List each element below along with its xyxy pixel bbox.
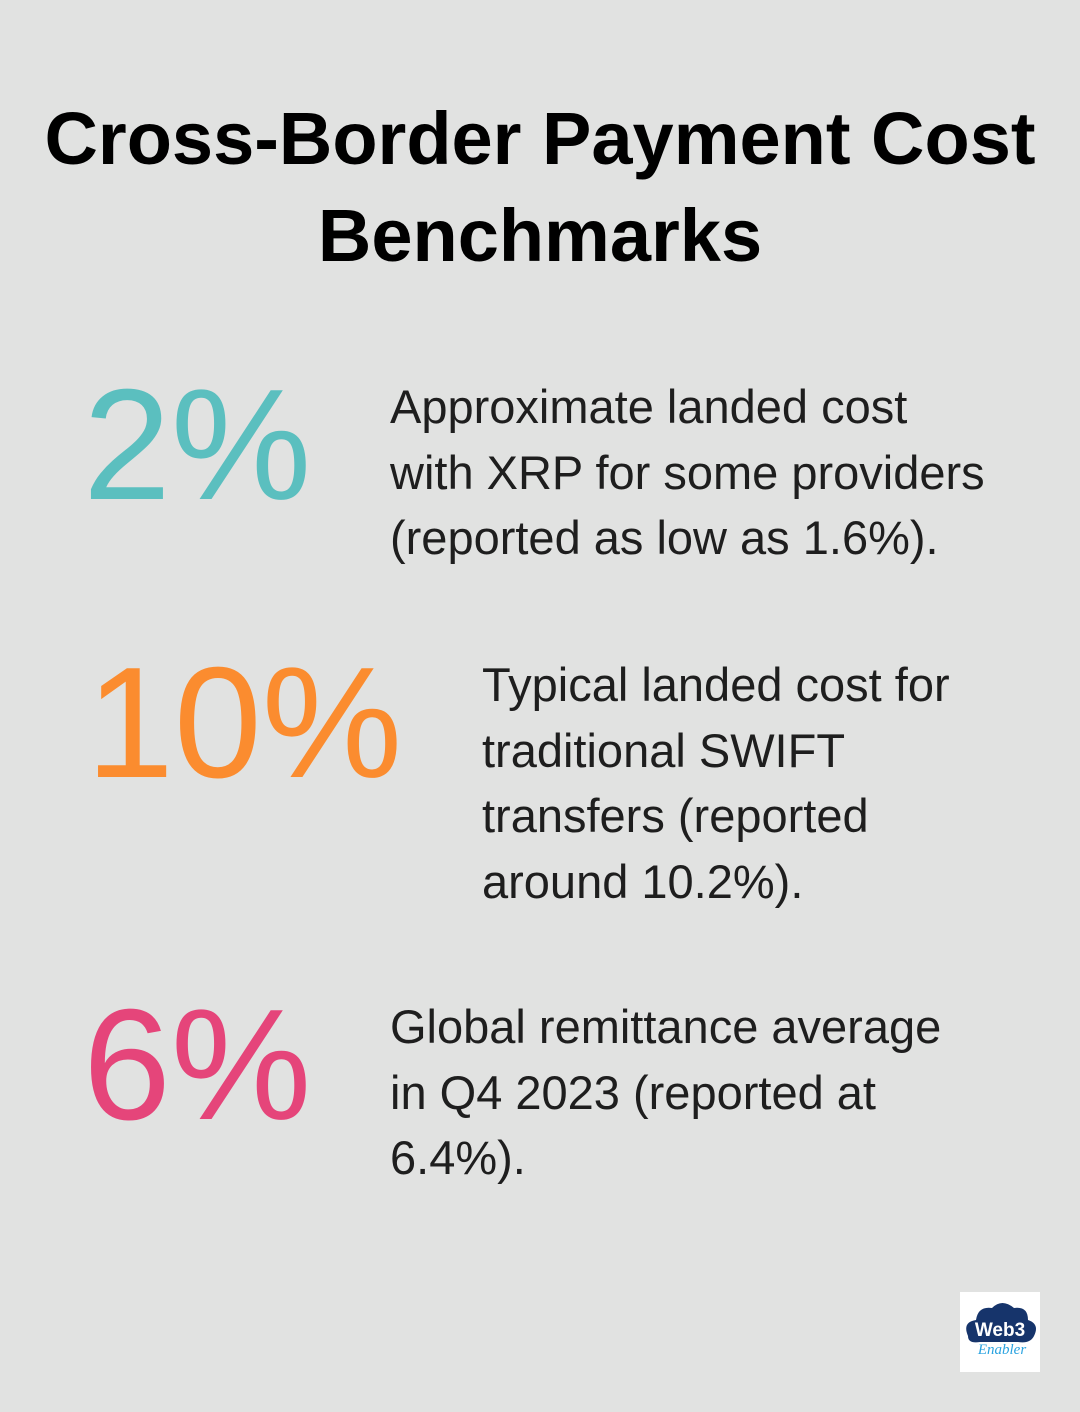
title	[44, 97, 1036, 277]
stat: 2%: 2%	[83, 357, 311, 533]
title: Benchmarks	[318, 194, 762, 277]
text: 2% description: (reported as low as 1.6%).	[390, 511, 939, 564]
text: 10% description	[482, 658, 950, 908]
text: 10% description: transfers (reported	[482, 789, 869, 842]
text: 6% description: Global remittance average	[390, 1000, 941, 1053]
logo: Web3 Enabler	[960, 1292, 1040, 1372]
text: 2% description: Approximate landed cost	[390, 380, 907, 433]
text: 6% description	[390, 1000, 941, 1184]
text: 2% description	[390, 380, 985, 564]
text: 10% description: Typical landed cost for	[482, 658, 950, 711]
stat: 6%: 6%	[83, 977, 311, 1153]
title: Cross-Border Payment Cost	[44, 97, 1036, 180]
text: 10% description: around 10.2%).	[482, 854, 803, 908]
logo: Web3 Enabler: Enabler	[977, 1342, 1026, 1358]
text: 6% description: 6.4%).	[390, 1131, 526, 1184]
text: 6% description: in Q4 2023 (reported at	[390, 1066, 876, 1118]
text: 2% description: with XRP for some providers	[390, 446, 985, 498]
logo: Web3 Enabler: Web3	[975, 1320, 1025, 1341]
text: 10% description: traditional SWIFT	[482, 724, 845, 776]
stat: 10%: 10%	[86, 635, 402, 811]
